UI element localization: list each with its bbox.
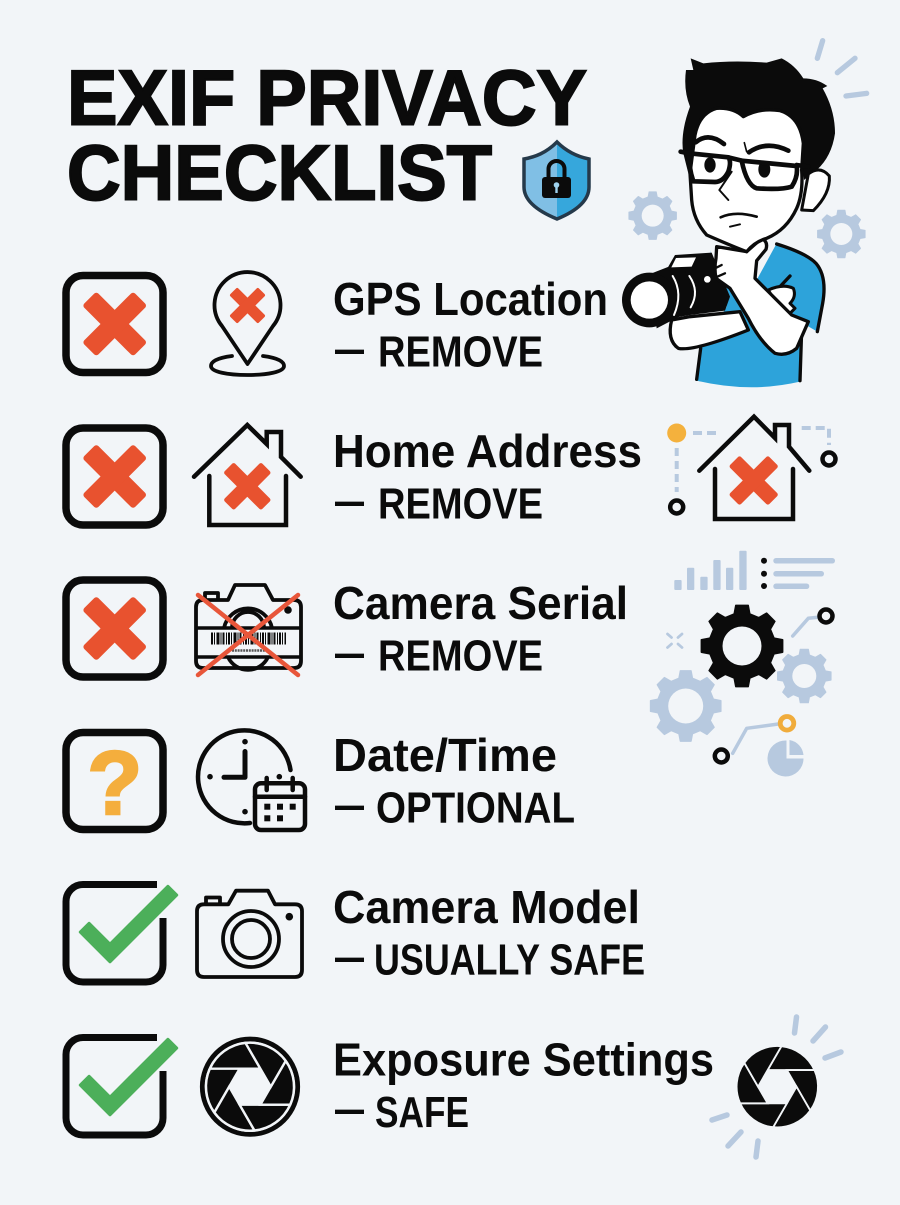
label: REMOVE xyxy=(378,328,543,376)
decoration: bar chart and list xyxy=(674,551,835,590)
label xyxy=(333,1034,714,1137)
icon: clock and calendar xyxy=(198,730,305,830)
title: EXIF PRIVACY xyxy=(67,56,587,142)
face xyxy=(690,108,803,252)
small light gear xyxy=(778,649,831,703)
black gear xyxy=(701,605,783,687)
status box: remove xyxy=(66,428,163,525)
label: — xyxy=(335,324,364,374)
lower arm xyxy=(670,312,748,349)
label: Date/Time xyxy=(333,729,557,781)
label: Camera Serial xyxy=(333,577,628,629)
status box: optional: ? xyxy=(87,734,142,834)
label: — xyxy=(335,780,364,830)
decoration: aperture with rays xyxy=(712,1017,841,1157)
label: REMOVE xyxy=(378,480,543,528)
brows, nose, mouth xyxy=(696,137,788,227)
icon: map pin with cross xyxy=(211,272,284,375)
row 4: Date/Time xyxy=(66,729,575,834)
status box: safe xyxy=(66,884,177,982)
row 1: GPS Location xyxy=(66,272,608,376)
icon: camera xyxy=(197,891,302,977)
label xyxy=(333,577,628,680)
label: OPTIONAL xyxy=(376,784,575,832)
icon: house with cross xyxy=(194,425,301,525)
title xyxy=(67,56,587,216)
camera xyxy=(622,253,730,328)
label: Exposure Settings xyxy=(333,1034,714,1086)
crossed forearm and hand xyxy=(715,238,808,354)
label: — xyxy=(335,628,364,678)
decoration: gears and nodes xyxy=(651,605,832,776)
label xyxy=(333,273,608,376)
row 2: Home Address xyxy=(66,425,642,528)
gear right xyxy=(818,210,865,258)
shirt xyxy=(697,243,824,387)
icon: aperture in ring xyxy=(192,1030,308,1143)
label xyxy=(333,425,642,528)
rays above head xyxy=(817,41,867,96)
ear xyxy=(802,170,829,211)
label: USUALLY SAFE xyxy=(374,936,645,984)
status box: remove xyxy=(66,580,163,677)
character: thinking photographer with camera xyxy=(622,41,867,387)
decoration: house with connector nodes xyxy=(667,417,836,519)
label: SAFE xyxy=(375,1088,469,1137)
icon: shield with padlock xyxy=(524,142,589,219)
label: Home Address xyxy=(333,425,642,477)
eyes xyxy=(704,157,770,178)
status box: optional xyxy=(66,732,163,834)
title: CHECKLIST xyxy=(67,130,492,216)
label xyxy=(333,881,645,984)
label: GPS Location xyxy=(333,273,608,325)
icon: camera with barcode crossed out xyxy=(196,585,301,675)
gear left xyxy=(629,192,676,239)
hair xyxy=(682,58,835,180)
label: — xyxy=(335,476,364,526)
label: — xyxy=(335,1084,364,1134)
label xyxy=(333,729,575,832)
glasses xyxy=(681,152,808,189)
label: REMOVE xyxy=(378,632,543,680)
pie chart xyxy=(767,740,804,776)
row 3: Camera Serial xyxy=(66,577,628,680)
label: Camera Model xyxy=(333,881,640,933)
label: — xyxy=(335,932,364,982)
row 5: Camera Model xyxy=(66,881,645,984)
status box: remove xyxy=(66,276,163,372)
row 6: Exposure Settings xyxy=(66,1030,714,1143)
status box: safe xyxy=(66,1038,177,1135)
big light gear xyxy=(651,671,721,741)
